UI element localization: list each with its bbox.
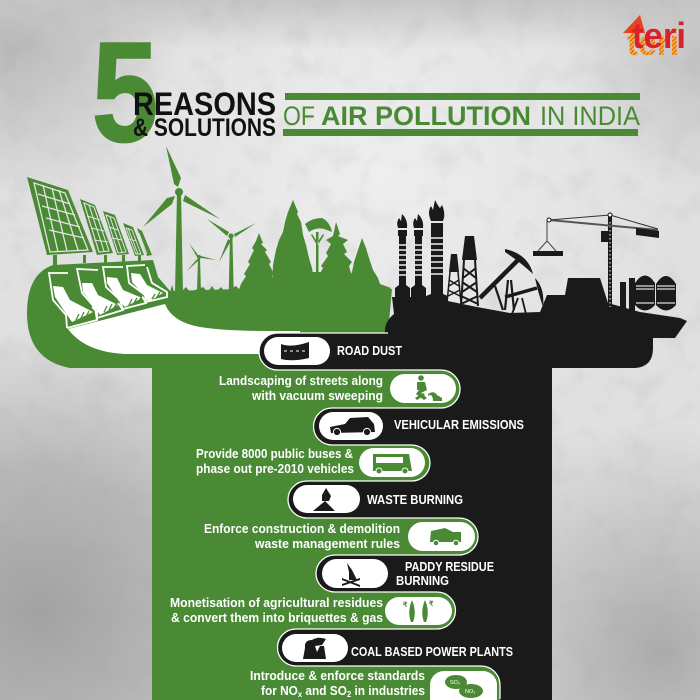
smokestacks: [395, 200, 448, 306]
reason: paddy residue burning: PADDY RESIDUE: [405, 560, 494, 574]
icon: burning heap: [313, 488, 335, 511]
solution: NOx and SO2 standards: in industries: [351, 684, 425, 698]
icon: power plant: [303, 638, 326, 659]
icon: vacuum sweeper: [415, 375, 442, 401]
panel: reasons and solutions list: [170, 337, 524, 700]
icon: gas clouds: [445, 675, 467, 689]
icon: concrete mixer truck: [430, 528, 461, 542]
pump jacks: [480, 249, 543, 314]
column: black stepped region: [259, 333, 552, 700]
solution: landscaping: with vacuum sweeping: [251, 389, 383, 403]
title: & SOLUTIONS: [133, 114, 276, 142]
solution: public buses: Provide 8000 public buses &: [196, 447, 353, 461]
logo: teri: teri: [632, 15, 686, 56]
column: green: [152, 368, 552, 700]
heading: of air pollution in india: IN INDIA: [540, 101, 640, 131]
trees: [238, 200, 391, 334]
storage tanks and small towers: [620, 276, 676, 312]
reason: vehicular emissions: VEHICULAR EMISSIONS: [394, 418, 524, 432]
solution: landscaping: [219, 374, 456, 403]
solution: agricultural residues: ₹: [403, 601, 408, 609]
landscape: black industrial side: [385, 200, 687, 368]
oil derricks: [447, 236, 478, 306]
logo: teri: teri: [627, 22, 679, 63]
ground: [385, 278, 687, 368]
icon: campfire: [342, 563, 360, 587]
solution: agricultural residues: Monetisation of agricultural residues: [170, 596, 383, 610]
title: [92, 13, 640, 172]
icon: bus: [373, 454, 412, 471]
solution: NOx and SO2 standards: 2: [347, 690, 352, 699]
solution: NOx and SO2 standards: NO₂: [465, 689, 475, 695]
reason: coal based power plants: COAL BASED POWER PLANTS: [351, 645, 513, 659]
heading: of air pollution in india: OF: [283, 101, 315, 131]
numeral 5: 5: [92, 13, 158, 172]
solution: public buses: phase out pre-2010 vehicles: [196, 462, 354, 476]
icon: car: [330, 417, 375, 433]
grass: [170, 285, 258, 296]
reason: road dust: ROAD DUST: [337, 344, 402, 358]
solution: agricultural residues: ₹: [429, 600, 434, 608]
solution: agricultural residues: [170, 596, 452, 625]
hydro gates: [49, 265, 167, 328]
solution: NOx and SO2 standards: for NO: [261, 684, 300, 698]
icon: road: [281, 342, 309, 360]
reason: vehicular emissions: [319, 412, 524, 440]
landscape: green renewable energy side: [27, 146, 552, 700]
solution: NOx and SO2 standards: [250, 669, 497, 700]
ground and hydro dam: [27, 260, 392, 368]
solution: NOx and SO2 standards: and SO: [302, 684, 347, 698]
construction crane: [533, 213, 659, 310]
reason: road dust: [264, 337, 402, 365]
heading: reasons and solutions: REASONS: [133, 86, 276, 122]
solution: waste management: Enforce construction & demolition: [204, 522, 400, 536]
icon: wheat and rupee: [409, 600, 428, 622]
solution: NOx and SO2 standards: Introduce & enforce standards: [250, 669, 425, 683]
wind turbines: [143, 146, 256, 294]
solution: NOx and SO2 standards: SO₂: [450, 680, 460, 686]
solution: public buses: [196, 447, 425, 477]
reason: waste burning: [293, 485, 463, 513]
reason: paddy residue burning: [322, 559, 494, 588]
solution: waste management: [204, 522, 475, 551]
solution: NOx and SO2 standards: x: [298, 690, 303, 699]
solution: waste management: waste management rules: [254, 537, 400, 551]
reason: coal based power plants: [282, 634, 513, 662]
solar panels: [27, 177, 152, 265]
reason: waste burning: WASTE BURNING: [367, 493, 463, 507]
heading: of air pollution in india: AIR POLLUTION: [321, 101, 531, 131]
solution: agricultural residues: & convert them into briquettes & gas: [171, 611, 383, 625]
column outline: [259, 333, 500, 699]
reason: paddy residue burning: BURNING: [396, 574, 449, 588]
solution: landscaping: Landscaping of streets along: [219, 374, 383, 388]
white road: [68, 304, 300, 354]
heading: of air pollution in india: [283, 93, 640, 136]
